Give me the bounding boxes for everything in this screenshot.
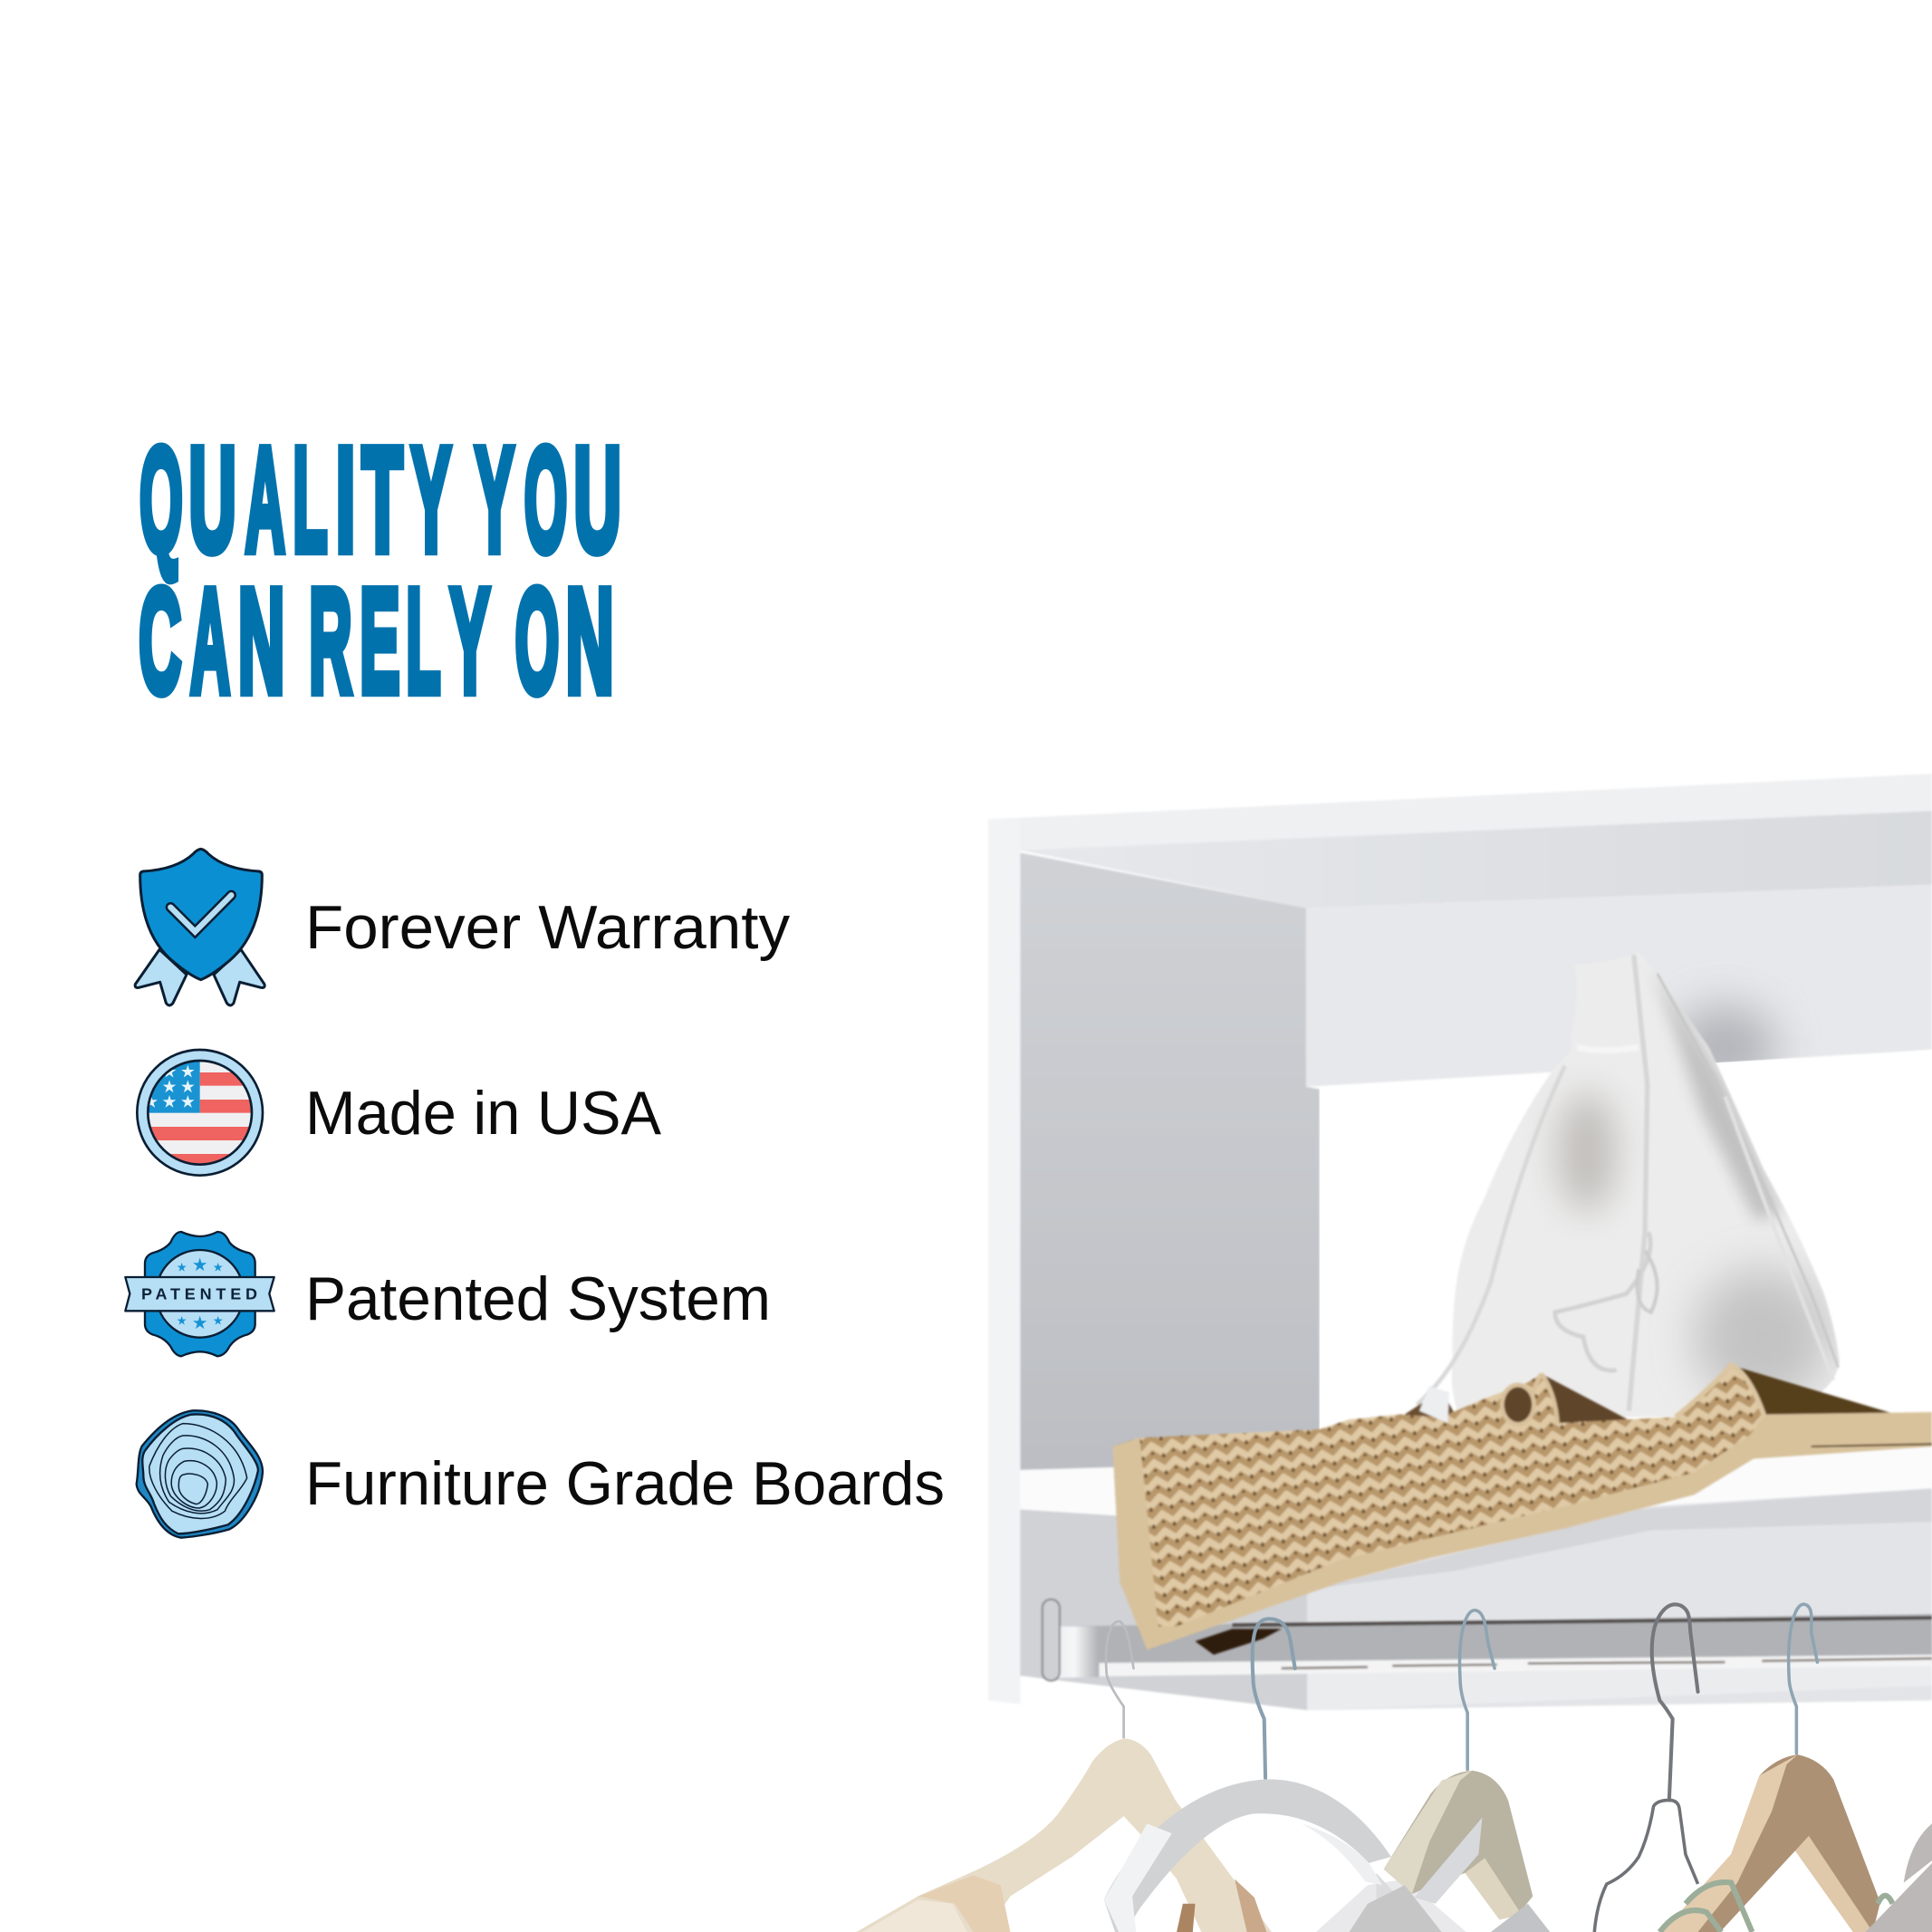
icon: patented seal [125,1232,274,1356]
hanger hooks [1106,1604,1817,1800]
title: I [336,417,355,582]
benefit list [305,893,945,1518]
hanger 2: grey velvet [1104,1779,1442,1932]
title: Y [475,417,514,582]
shelf carcass [988,774,1932,1710]
title: O [515,558,559,724]
title: Y [450,558,489,724]
title: E [360,558,400,724]
title: N [238,558,284,724]
infographic canvas: U [574,417,621,582]
garment under hanger 2 [1316,1879,1466,1932]
right-edge garment [1866,1823,1932,1932]
benefit list: Made in USA [305,1079,662,1148]
icon: patented seal: PATENTED [141,1285,257,1303]
hanger 5: oak wood [1659,1754,1892,1932]
knitted throw [1112,1365,1932,1655]
title: A [190,558,230,724]
hanging rod [1043,1600,1932,1680]
drawstring bag [1417,953,1840,1417]
benefit list: Furniture Grade Boards [305,1449,945,1518]
title: A [245,417,285,582]
title: C [139,558,181,724]
title: U [188,417,236,582]
icon: wood rings [137,1410,263,1538]
hanger 3: pale wood with grey tape [1376,1771,1550,1932]
white opening below back panel [1320,1051,1927,1429]
hanger 1: pale wood [856,1738,1272,1932]
shadow of bag [1673,1005,1777,1090]
title: O [524,417,567,582]
hanger 4: wire [1594,1800,1698,1932]
title: R [309,558,352,724]
title: N [565,558,614,724]
title: T [362,417,403,582]
title: Y [411,417,450,582]
benefit list: Patented System [305,1264,771,1333]
icon: warranty shield [135,849,264,1005]
photo: closet shelf unit with bag, throw and hangers [856,774,1932,1932]
infographic canvas [124,442,1932,1932]
title: L [293,417,328,582]
title: Q [139,417,183,582]
title [139,417,621,724]
icon: USA flag badge [137,1050,263,1176]
benefit list: Forever Warranty [305,893,790,962]
title: L [406,558,440,724]
